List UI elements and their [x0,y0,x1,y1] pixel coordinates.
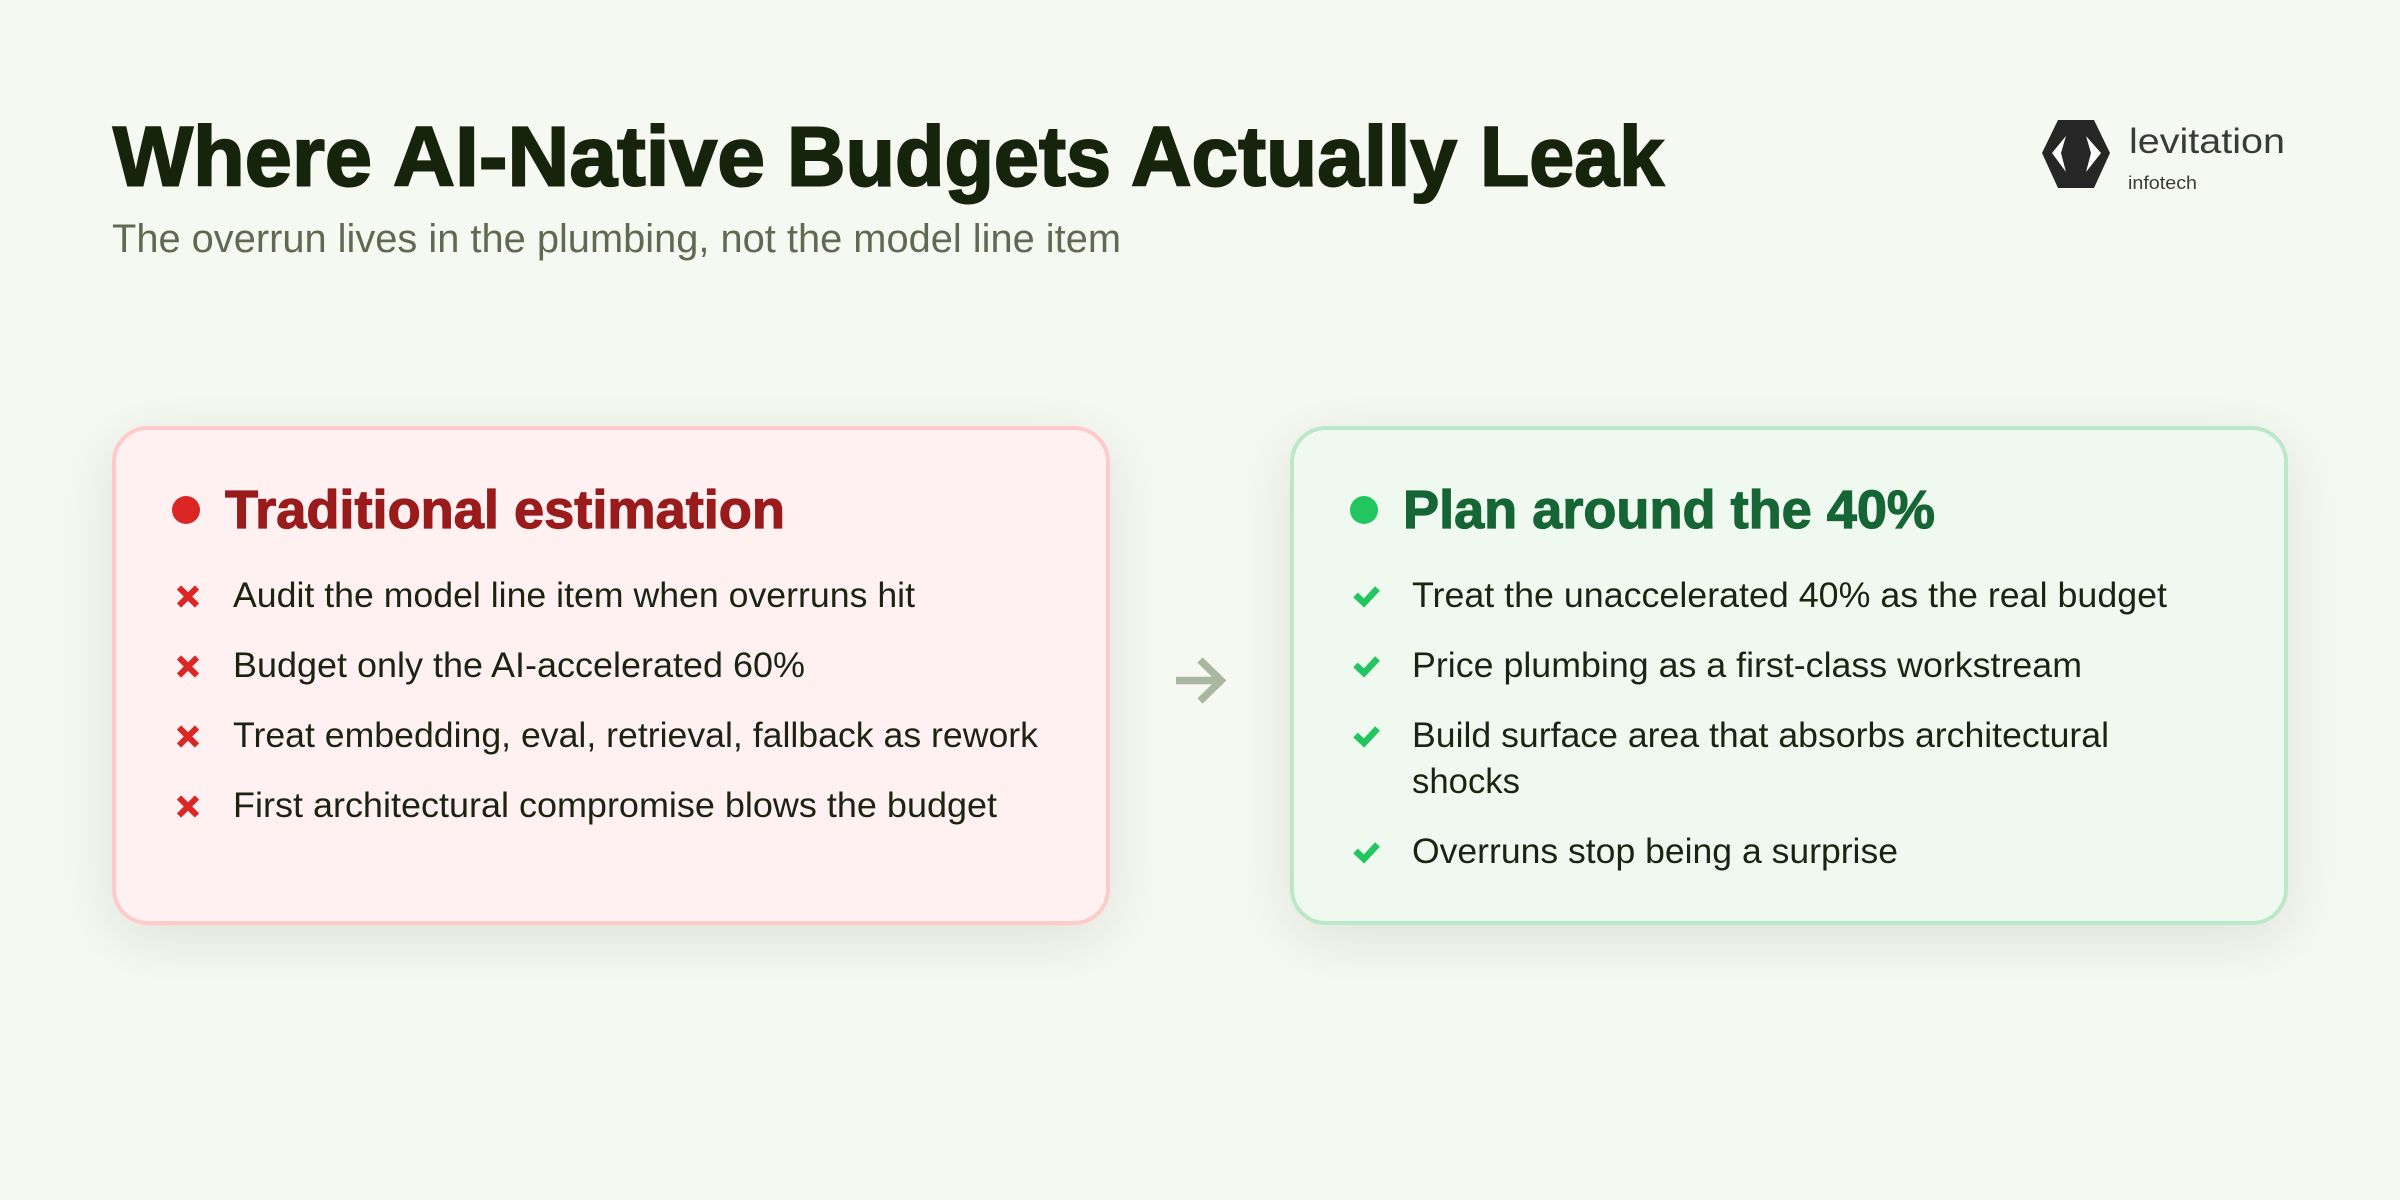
heading: traditional estimation: Traditional estimation [225,480,785,540]
item 3: Build surface area that absorbs architectural [1412,715,2109,755]
icon: green status dot [1350,496,1378,524]
item 3: shocks [1412,761,1520,801]
icon: red status dot [172,496,200,524]
title: AI-Native [393,110,765,204]
subtitle: The overrun lives in the plumbing, not the model line item [112,217,1121,261]
logo wordmark: levitation [2129,122,2285,161]
item 1: Audit the model line item when overruns hit [233,575,915,615]
item 2: Price plumbing as a first-class workstream [1412,645,2082,685]
panel: traditional estimation [112,426,1110,925]
logo: levitation infotech [2042,120,2285,193]
item 3 [1356,715,2109,801]
item 3: Treat embedding, eval, retrieval, fallback as rework [233,715,1038,755]
arrow [1176,658,1226,704]
item 2: Budget only the AI-accelerated 60% [233,645,805,685]
logo sub-wordmark: infotech [2128,173,2197,193]
title [112,110,1666,204]
icon: hexagon logo mark [2042,120,2110,188]
panel: plan around the 40% [1290,426,2288,925]
title: Actually [1131,110,1457,204]
title: Where [113,110,372,204]
item 4: Overruns stop being a surprise [1412,831,1898,871]
title: Budgets [787,110,1111,204]
item 4: First architectural compromise blows the budget [233,785,997,825]
item 1: Treat the unaccelerated 40% as the real budget [1412,575,2167,615]
title: Leak [1480,110,1664,204]
heading: plan around the 40%: Plan around the 40% [1403,480,1935,540]
